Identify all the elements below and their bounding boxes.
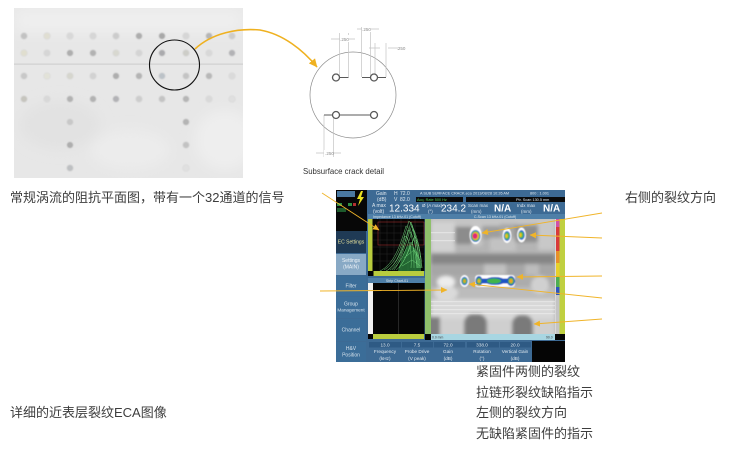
diagram: subsurface crack detail: .250 [340,37,349,42]
bottom parameter boxes: Frequency [374,349,397,354]
bottom parameter boxes: (dB) [444,356,453,361]
impedance traces [398,245,421,271]
callout arrows [320,193,602,324]
photo: fuselage panel with fasteners [14,8,255,178]
C-scan panel: C-Scan 13 kHz-01 (Cutoff) [474,215,516,219]
strip chart panel: Strip Chart-01 [386,279,408,283]
arrow: right crack direction [530,235,602,238]
bottom parameter boxes: (dB) [511,356,520,361]
side menu: Channel [342,328,360,334]
bottom parameter boxes: Rotation [473,349,491,354]
bottom parameter boxes: 7.5 [414,342,421,348]
instrument screen: ECA display [320,190,602,362]
bottom parameter boxes: 20.0 [510,342,520,348]
label: detailed ECA image: 详细的近表层裂纹ECA图像 [10,405,167,420]
C-scan panel [368,214,565,362]
strip chart panel [368,278,425,339]
bottom parameter boxes: Gain [443,349,453,354]
diagram: subsurface crack detail: .250 [325,151,334,156]
bottom parameter boxes: Probe Drive [405,349,430,354]
label: right crack direction: 右侧的裂纹方向 [625,190,716,205]
faint horizontal banding [431,232,555,314]
scan position ruler: 90.0 [546,336,553,340]
top readouts: (dB) [377,197,387,203]
top readouts: 234.2 [441,204,466,214]
top readouts: 2013/08/28 10:26 AM [473,192,509,196]
side menu: Management [337,308,365,312]
arrow: fastener without defect [534,319,602,324]
cracks and fasteners [324,74,386,118]
top readouts: V [394,197,398,203]
arrow: left crack direction [469,284,602,298]
top readouts: (°) [428,209,433,214]
bottom parameter boxes: (kHz) [379,356,391,361]
label: zipper crack indication: 拉链形裂纹缺陷指示 [476,385,593,400]
label: crack on both sides: 紧固件两侧的裂纹 [476,364,580,379]
diagram caption: Subsurface crack detail [303,167,384,176]
fastener rows [21,33,235,171]
top readouts: Indx max [517,203,536,208]
crack indications: zipper and left side [460,275,515,287]
top readouts: H [394,191,398,197]
top readouts: A max [372,203,386,209]
top readouts: 72.0 [400,191,410,197]
top readouts: (volt) [373,209,384,215]
side menu: Settings [342,258,361,264]
colour scale and amplitude strip [555,219,565,334]
side menu: Filter [345,284,357,290]
arrow: crack on both sides of fastener [482,213,602,233]
top readouts: Ptr. Scan 130.5 mm [516,198,549,202]
side menu: H&V [346,346,357,352]
impedance plane panel [368,214,425,276]
top readouts: Gain [376,191,387,197]
side menu: Group [344,302,358,308]
label: impedance plane: 常规涡流的阻抗平面图，带有一个32通道的信号 [10,190,284,205]
top readouts: 82.0 [400,197,410,203]
side menu: EC Settings [338,240,365,246]
diagram: subsurface crack detail: .250 [397,46,406,51]
circle highlight on photo [150,40,200,90]
impedance plane panel: Impedance 13 kHz-01 (Cutoff) [373,215,421,219]
dimension lines [316,27,398,157]
diagram: subsurface crack detail [303,25,406,176]
side menu [336,231,366,362]
top readouts: Scan max [468,203,489,208]
top readouts: A SUB SURFACE CRACK.eca [420,192,473,196]
bottom parameter boxes: 338.0 [476,342,488,348]
side menu: Position [342,352,360,358]
crack indications: right side [470,226,526,244]
scan position ruler: 0.0 mm [432,336,443,340]
top readouts: 800 : 1.001 [530,192,549,196]
arrow: ECA image [320,290,447,291]
scan position ruler [425,334,565,340]
gray scan image [431,219,555,334]
arrow: zipper crack [517,276,602,277]
top readouts: 12.334 [389,204,420,214]
side menu: (MAIN) [343,264,359,270]
arrow: impedance plane [322,193,379,230]
top readouts [372,191,565,215]
status block with battery and lightning icon [336,190,367,231]
top readouts: (mm) [521,209,532,214]
label: left crack direction: 左侧的裂纹方向 [476,405,567,420]
top readouts: (mm) [471,209,482,214]
top readouts: Ø (A max) [422,203,443,208]
top readouts: N/A [543,204,560,214]
bottom parameter boxes: 13.0 [380,342,390,348]
arrow: photo to crack detail [195,30,317,67]
bottom parameter boxes: Vertical Gain [502,349,529,354]
label: no-defect fastener: 无缺陷紧固件的指示 [476,426,593,441]
bottom parameter boxes: 72.0 [443,342,453,348]
top readouts: N/A [494,204,511,214]
diagram: subsurface crack detail: .250 [362,27,371,32]
bottom parameter boxes: (°) [480,356,485,361]
top readouts: Acq. Rate 500 Hz [417,198,447,202]
bottom parameter boxes [368,341,565,362]
bottom parameter boxes: (V peak) [408,356,426,361]
